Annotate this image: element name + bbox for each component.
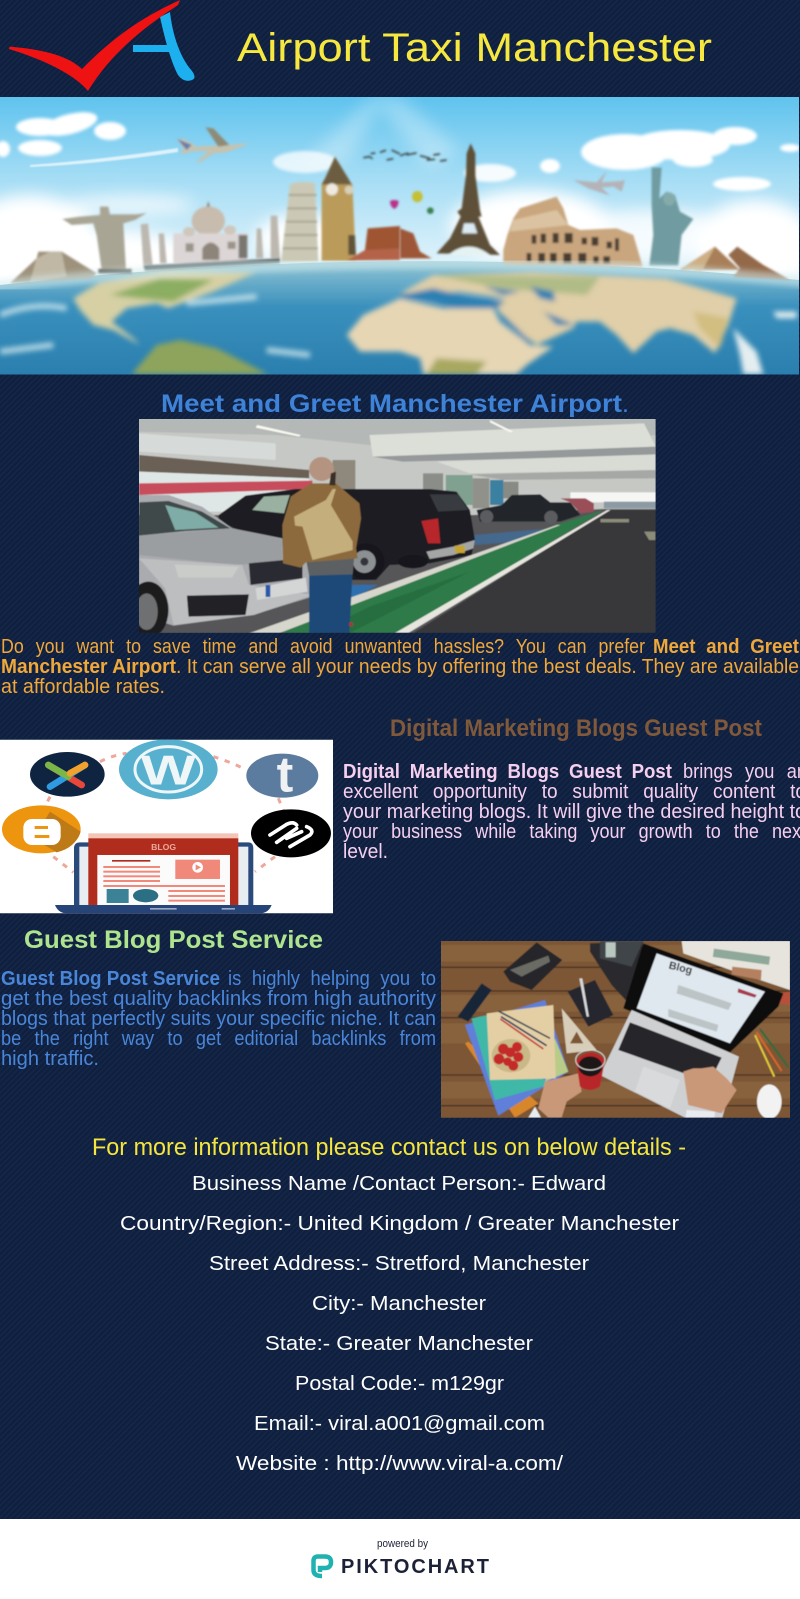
footer	[0, 1519, 800, 1599]
clouds upper left	[16, 118, 64, 136]
icon: Piktochart mark	[314, 1556, 331, 1576]
contact details	[120, 1172, 679, 1475]
globe	[0, 261, 799, 375]
contact details: Website : http://www.viral-a.com/	[236, 1452, 563, 1475]
illustration: blog platforms around a laptop	[0, 739, 333, 914]
paragraph: Guest Blog Post Service: get the best quality backlinks from high authority	[1, 988, 436, 1010]
heading: Guest Blog Post Service: Guest Blog Post Service	[24, 926, 323, 954]
wordmark: PIKTOCHART	[341, 1556, 489, 1578]
paragraph: Meet and Greet	[1, 636, 799, 698]
contact heading: For more information please contact us on below details -	[92, 1134, 686, 1161]
illustration: blog platforms around a laptop: BLOG	[151, 842, 176, 852]
logo	[9, 0, 194, 91]
photo: laptop on a wooden desk	[435, 935, 795, 1125]
hero image: world landmarks on a globe	[0, 97, 800, 375]
heading: Digital Marketing Blogs Guest Post: Digital Marketing Blogs Guest Post	[390, 715, 762, 742]
paragraph: Digital Marketing Blogs Guest Post: level.	[343, 841, 388, 863]
contact details: State:- Greater Manchester	[265, 1332, 533, 1355]
paragraph: Guest Blog Post Service: is highly helping you to	[228, 968, 436, 990]
contact details: Postal Code:- m129gr	[295, 1372, 504, 1395]
title: Airport Taxi Manchester	[237, 26, 712, 70]
paragraph: Meet and Greet: Manchester Airport	[1, 656, 176, 678]
photo: laptop on a wooden desk: Blog	[668, 960, 693, 977]
paragraph: Guest Blog Post Service: Guest Blog Post Service	[1, 968, 220, 990]
mist on horizon	[0, 263, 800, 287]
illustration: blog platforms around a laptop: W	[141, 746, 197, 793]
contact details: Email:- viral.a001@gmail.com	[254, 1412, 545, 1435]
powered by label: powered by	[377, 1538, 428, 1550]
illustration: blog platforms around a laptop: t	[277, 747, 294, 803]
black truck	[219, 489, 475, 580]
paragraph: Digital Marketing Blogs Guest Post: Digital Marketing Blogs Guest Post	[343, 761, 672, 783]
left landmarks	[10, 127, 400, 283]
contact details: City:- Manchester	[312, 1292, 486, 1315]
heading: Meet and Greet: .	[622, 390, 629, 418]
contact details: Street Address:- Stretford, Manchester	[209, 1252, 589, 1275]
paragraph: Meet and Greet: Do you want to save time and avoid unwanted hassles? You can prefer	[1, 636, 645, 658]
paragraph: Guest Blog Post Service: blogs that perfectly suits your specific niche. It can	[1, 1008, 436, 1030]
paragraph: Meet and Greet: at affordable rates.	[1, 676, 165, 698]
silver car	[139, 495, 312, 626]
heading: Meet and Greet: Meet and Greet Manchester Airport	[161, 390, 623, 418]
paragraph: Digital Marketing Blogs Guest Post: your marketing blogs. It will give the desired height to	[343, 801, 800, 823]
photo: man walking in a parking garage	[128, 415, 660, 638]
contact details: Business Name /Contact Person:- Edward	[192, 1172, 606, 1195]
paragraph: Digital Marketing Blogs Guest Post	[343, 761, 800, 863]
far truck	[477, 494, 580, 522]
paragraph: Guest Blog Post Service: high traffic.	[1, 1048, 99, 1070]
paragraph: Guest Blog Post Service: be the right way to get editorial backlinks from	[1, 1028, 436, 1050]
right landmarks	[400, 143, 790, 280]
contact details: Country/Region:- United Kingdom / Greater Manchester	[120, 1212, 679, 1235]
paragraph: Guest Blog Post Service	[1, 968, 436, 1070]
man	[309, 570, 353, 633]
